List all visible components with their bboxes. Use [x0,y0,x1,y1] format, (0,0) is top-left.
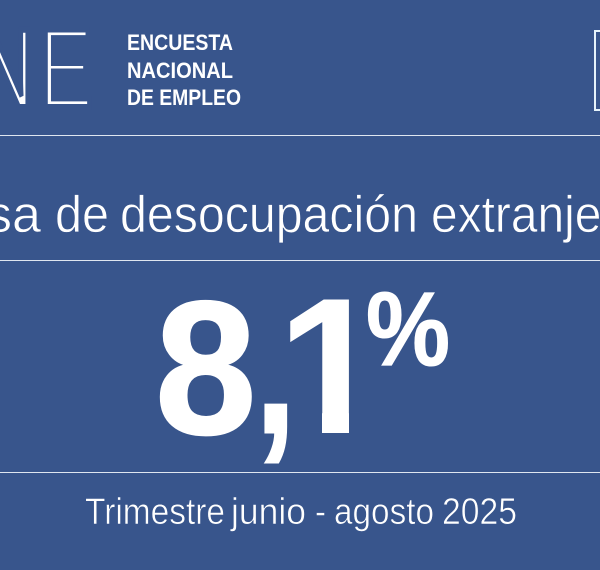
period label: agosto [334,491,434,532]
heading: indicator title [0,186,600,244]
period label: Trimestre [85,491,225,532]
logo subtitle: Encuesta Nacional de Empleo: ENCUESTA [127,30,233,55]
heading: indicator title: de [55,186,109,244]
logo subtitle: Encuesta Nacional de Empleo [127,30,241,110]
logo subtitle: Encuesta Nacional de Empleo: DE EMPLEO [127,85,241,110]
period label: - [315,491,326,532]
period label [85,491,517,532]
icon: partial logo frame at right edge [595,31,600,110]
logo subtitle: Encuesta Nacional de Empleo: NACIONAL [127,58,233,83]
heading: indicator title: desocupación [120,186,418,244]
main figure: 8,1%: , [254,259,297,475]
logo: INE wordmark: E [39,6,93,131]
period label: junio [230,491,306,532]
main figure: 8,1%: 1 [277,258,385,475]
main figure: 8,1% [155,258,450,475]
main figure: 8,1%: % [366,271,450,388]
main figure: 8,1%: 8 [155,262,256,474]
logo: INE wordmark [0,6,93,131]
period label: 2025 [442,491,517,532]
